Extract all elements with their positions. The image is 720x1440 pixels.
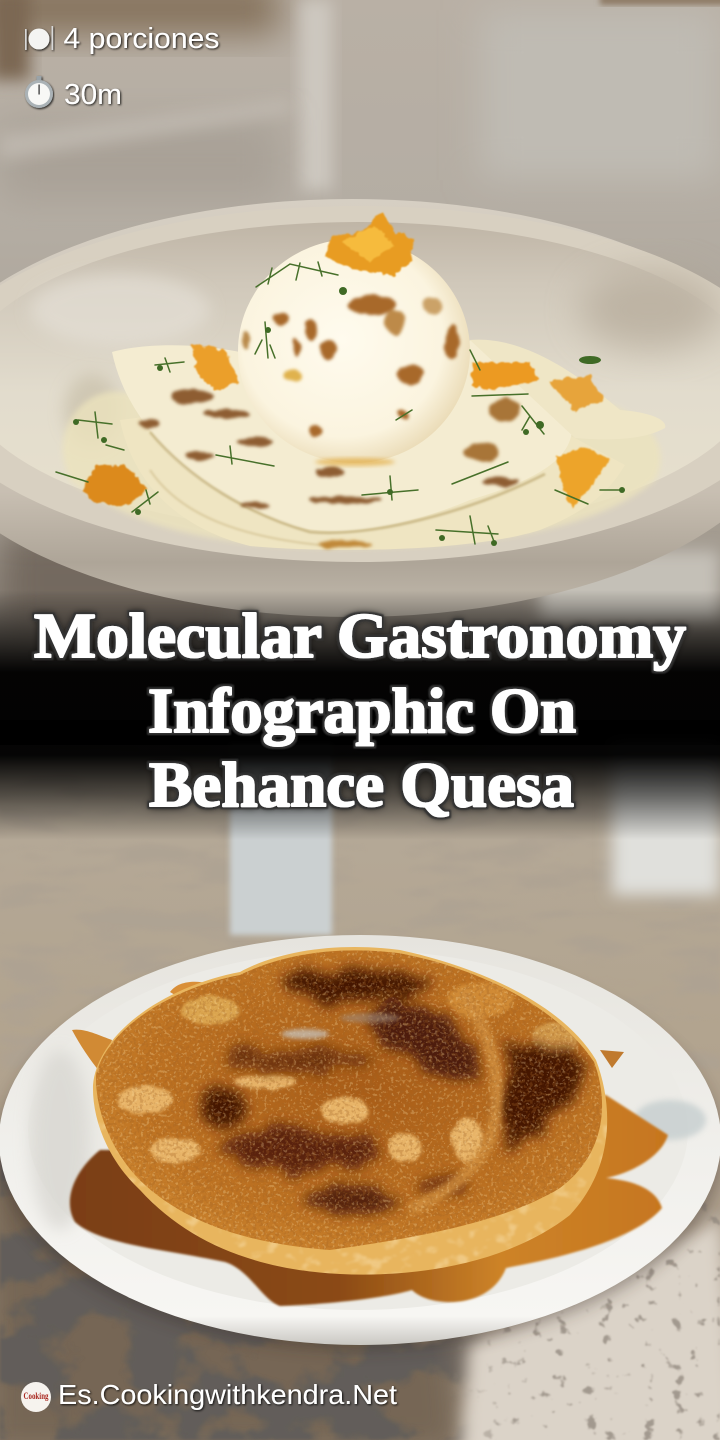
dark title band [0,590,720,840]
title line 3: Behance Quesa [149,750,574,820]
orange candied garnish [82,345,610,508]
orange shard on sphere [325,212,414,276]
plate [0,935,720,1345]
title line 1: Molecular Gastronomy [34,601,686,671]
light crust patches [117,982,577,1162]
title [34,601,686,820]
icon: site logo [21,1382,51,1412]
pancake [92,947,608,1275]
bottom photo: plate with caramel pancake [0,745,720,1440]
crepe char marks [140,389,521,548]
blurred counter background [0,0,720,720]
butter sauce pool [62,391,661,548]
top photo: bowl on marble counter [0,0,720,720]
dark caramel blotches [199,969,582,1215]
folded crepe [112,340,665,550]
bowl outer body [0,199,720,617]
bowl rim [0,246,720,562]
herb sprigs [56,262,620,544]
title line 2: Infographic On [148,676,576,746]
pale crease [410,990,497,1210]
sphere brown spots [242,295,459,436]
site url: Es.Cookingwithkendra.Net [58,1379,397,1410]
plate inner well [28,950,688,1310]
servings text: 4 porciones [64,23,220,55]
icon: stopwatch [25,76,53,108]
plate shadow [0,950,720,1350]
icon: plate and cutlery [25,26,53,50]
bowl inner basin [0,222,720,490]
icon: site logo: Cooking [24,1391,49,1401]
pancake side [92,947,608,1275]
pancake crust [96,950,602,1250]
caramel sauce pool [70,1095,668,1306]
sphere [238,239,470,466]
cook time text: 30m [64,79,122,111]
herb leaves [73,287,625,546]
marble counter [0,745,720,1440]
